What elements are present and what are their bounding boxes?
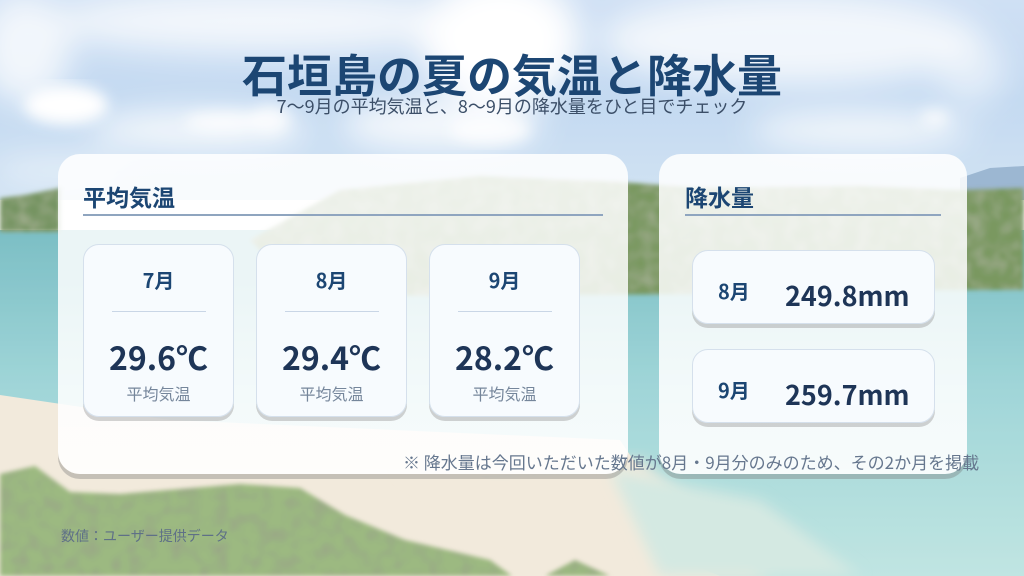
rainfall value: 259.7mm (785, 374, 910, 413)
title: 石垣島の夏の気温と降水量 (242, 40, 782, 105)
source: 数値：ユーザー提供データ (61, 526, 229, 546)
card: August rainfall (692, 250, 935, 324)
month: 9月 (718, 375, 750, 404)
card: September rainfall (692, 349, 935, 423)
month: 8月 (718, 276, 750, 305)
month: 9月 (489, 265, 520, 294)
panel: rainfall (659, 154, 967, 474)
panel: average temperature (58, 154, 628, 474)
heading: average temperature (83, 182, 603, 216)
caption: 平均気温 (126, 381, 190, 405)
subtitle: 7〜9月の平均気温と、8〜9月の降水量をひと目でチェック (277, 93, 747, 119)
footnote: ※ 降水量は今回いただいた数値が8月・9月分のみのため、その2か月を掲載 (403, 449, 979, 474)
card: August (256, 244, 407, 417)
month: 7月 (143, 265, 174, 294)
card: September (429, 244, 580, 417)
caption: 平均気温 (472, 381, 536, 405)
caption: 平均気温 (299, 381, 364, 405)
card: July (83, 244, 234, 417)
distant hill (960, 166, 1024, 200)
rainfall value: 249.8mm (785, 275, 910, 314)
temperature value: 29.4℃ (282, 334, 381, 380)
heading: rainfall (685, 182, 941, 216)
month: 8月 (316, 265, 347, 294)
temperature value: 28.2℃ (455, 334, 554, 380)
heading: rainfall: 降水量 (685, 179, 754, 213)
heading: average temperature: 平均気温 (83, 179, 175, 213)
temperature value: 29.6℃ (109, 334, 208, 380)
